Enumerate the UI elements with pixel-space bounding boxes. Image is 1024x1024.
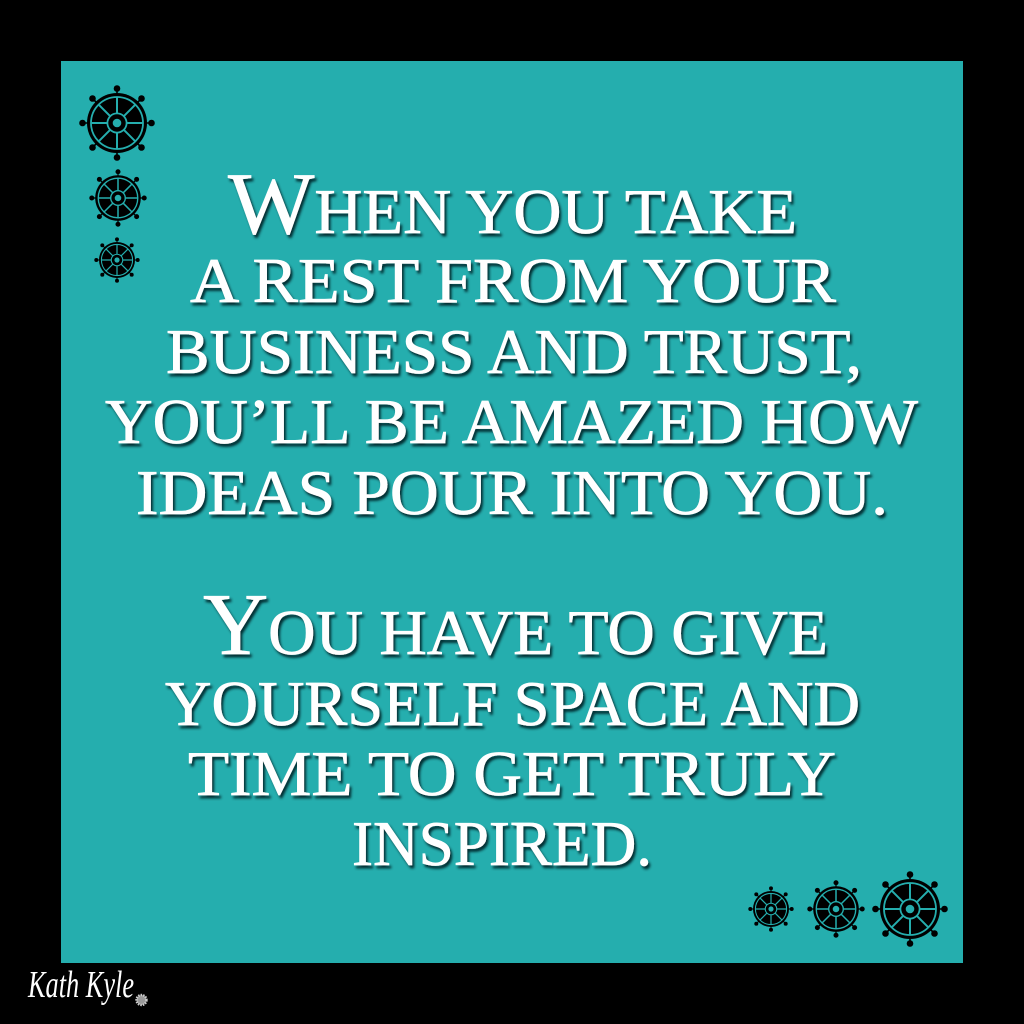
icon: small ship wheel top left <box>94 237 140 283</box>
quote line 7: YOURSELF SPACE AND <box>165 668 860 739</box>
icon: large ship wheel top left <box>79 85 155 161</box>
quote line 4: YOU’LL BE AMAZED HOW <box>105 386 919 457</box>
quote line 6: YOU HAVE TO GIVE <box>203 577 828 674</box>
signature: Kath Kyle <box>27 964 134 1006</box>
icon: small ship wheel bottom right <box>748 886 794 932</box>
quote line 2: A REST FROM YOUR <box>190 245 836 316</box>
quote line 9: INSPIRED. <box>352 808 652 879</box>
teal panel <box>61 61 963 963</box>
quote line 5: IDEAS POUR INTO YOU. <box>136 457 888 528</box>
quote line 8: TIME TO GET TRULY <box>188 738 836 809</box>
quote line 1: WHEN YOU TAKE <box>228 156 797 253</box>
icon: large ship wheel bottom right <box>872 871 948 947</box>
quote text <box>105 156 919 879</box>
icon: signature mandala <box>136 995 146 1005</box>
quote line 3: BUSINESS AND TRUST, <box>166 316 862 387</box>
icon: medium ship wheel bottom right <box>807 880 865 938</box>
icon: medium ship wheel top left <box>89 169 147 227</box>
